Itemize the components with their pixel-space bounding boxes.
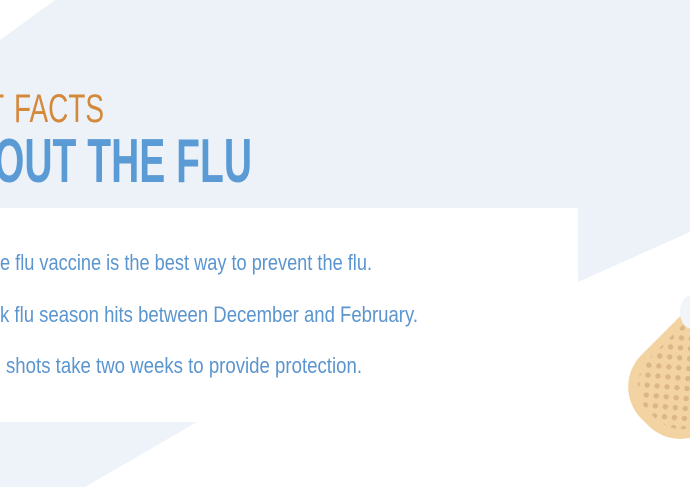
heading: OUT THE FLU (0, 127, 252, 196)
fact 2: k flu season hits between December and February. (0, 302, 418, 327)
fact 3: shots take two weeks to provide protection. (6, 353, 362, 378)
fact list (0, 250, 418, 378)
heading: FACTS (14, 87, 104, 131)
icon: bandage (610, 252, 690, 458)
heading (0, 87, 252, 196)
fact 1: e flu vaccine is the best way to prevent the flu. (0, 250, 372, 275)
panel: facts box (0, 208, 578, 422)
